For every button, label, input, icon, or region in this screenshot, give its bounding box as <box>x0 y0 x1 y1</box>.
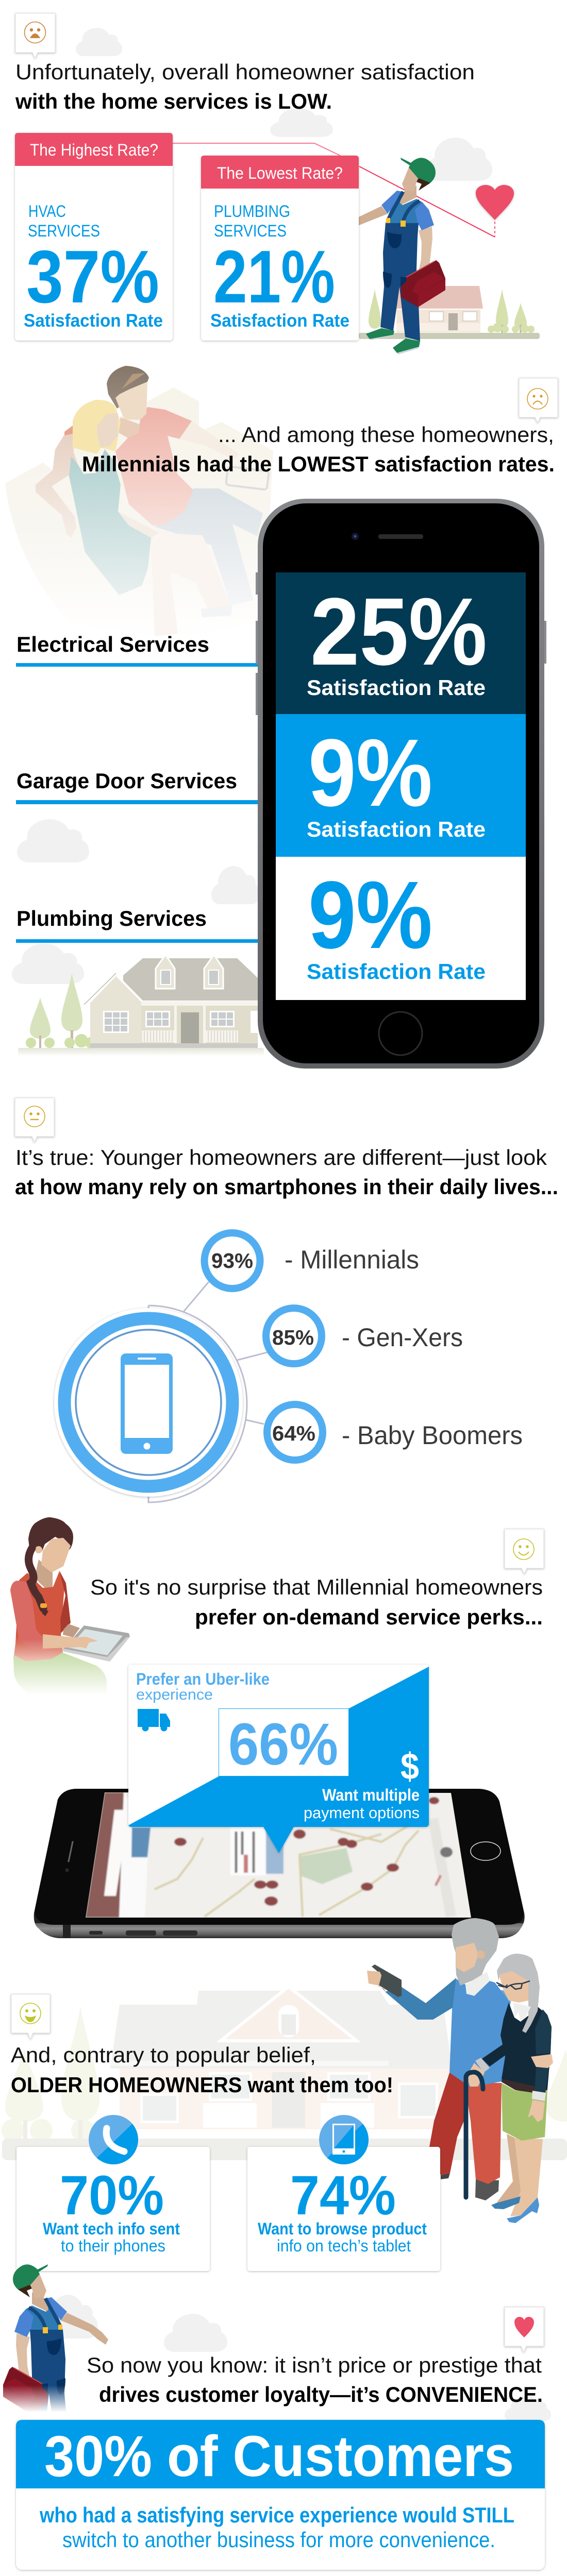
panel header: lowest rate <box>201 156 359 189</box>
service labels: Plumbing Services <box>16 906 207 930</box>
icon: smiling face speech bubble <box>505 1529 544 1574</box>
heading: on-demand service perks: prefer on-demand service perks... <box>195 1605 543 1629</box>
icon: tablet <box>319 2115 369 2164</box>
callout: on-demand perks: Prefer an Uber-like <box>136 1670 270 1688</box>
plumbing services panel <box>276 857 526 1000</box>
panel: 30% of customers <box>16 2420 545 2570</box>
phone with satisfaction rates <box>256 499 546 1069</box>
phone map screen <box>82 1791 474 1920</box>
illustration: plumber with toolbox <box>340 158 445 354</box>
stat: millennials 93%: 93% <box>211 1249 253 1273</box>
illustration: woman with tablet <box>10 1517 130 1695</box>
stat: gen-xers 85%: 85% <box>272 1326 314 1349</box>
stat: baby boomers 64%: 64% <box>272 1421 315 1445</box>
illustration: older couple <box>367 1918 553 2223</box>
illustration: house, trees and ground <box>359 286 540 339</box>
service labels <box>16 632 237 930</box>
decorative clouds, section six <box>43 2295 551 2421</box>
panel: tech info to phones <box>16 2112 210 2271</box>
heading: older homeowners too <box>11 2043 393 2097</box>
garage door services panel <box>276 714 526 857</box>
panel: highest rate: The Highest Rate? <box>30 141 158 159</box>
callout: on-demand perks: experience <box>136 1686 213 1703</box>
icon: red heart <box>476 185 514 220</box>
callout: on-demand perks <box>128 1665 429 1853</box>
service labels: Electrical Services <box>16 632 209 656</box>
panel: browse product on tablet: Want to browse product <box>258 2219 427 2238</box>
icon: sad face speech bubble <box>519 378 558 423</box>
divider lines for service rows <box>16 663 258 943</box>
garage door services panel: 9% <box>308 720 432 826</box>
illustration: plumber, mirrored and fading <box>3 2264 108 2411</box>
panel: browse product on tablet: 74% <box>290 2164 396 2226</box>
service labels: Garage Door Services <box>16 769 237 793</box>
panel: browse product on tablet <box>247 2112 440 2271</box>
heading: younger homeowners rely on smartphones: at how many rely on smartphones in their daily lives... <box>15 1175 558 1199</box>
heading: older homeowners too: OLDER HOMEOWNERS want them too! <box>11 2073 393 2097</box>
panel: highest rate: Satisfaction Rate <box>24 311 163 331</box>
heading: convenience drives loyalty: drives customer loyalty—it’s CONVENIENCE. <box>99 2382 543 2406</box>
panel: browse product on tablet: info on tech’s tablet <box>277 2236 411 2255</box>
icon: delivery truck <box>138 1709 170 1731</box>
stat: millennials 93% <box>204 1233 419 1289</box>
heading: convenience drives loyalty <box>87 2353 543 2406</box>
stat: gen-xers 85%: - Gen-Xers <box>342 1323 463 1352</box>
electrical services panel: Satisfaction Rate <box>307 675 486 700</box>
icon: grinning face speech bubble <box>11 1994 50 2039</box>
panel: lowest rate <box>201 156 359 341</box>
panel: highest rate: HVAC <box>28 202 66 221</box>
banner: 30% of customers: 30% of Customers <box>44 2424 514 2488</box>
connector lines between circles <box>184 1282 267 1424</box>
illustration: landscape phone with map <box>26 1789 541 1939</box>
electrical services panel <box>276 572 526 714</box>
panel: tech info to phones: Want tech info sent <box>43 2219 180 2238</box>
plumbing services panel: Satisfaction Rate <box>307 959 486 984</box>
panel: lowest rate: 21% <box>213 235 335 318</box>
icon: heart speech bubble <box>505 2307 544 2352</box>
background clouds, section one <box>76 28 492 181</box>
electrical services panel: 25% <box>310 579 487 685</box>
heading: older homeowners too: And, contrary to popular belief, <box>11 2043 316 2067</box>
heading: overall satisfaction is low: with the home services is LOW. <box>15 89 332 113</box>
panel: 30% of customers: switch to another business for more convenience. <box>62 2528 495 2552</box>
blue diagonal area <box>128 1667 429 1853</box>
heading: millennials lowest: Millennials had the LOWEST satisfaction rates. <box>82 452 555 476</box>
panel: highest rate <box>15 133 173 341</box>
stat: baby boomers 64%: - Baby Boomers <box>342 1421 523 1450</box>
panel header: highest rate <box>15 133 173 166</box>
panel: lowest rate: Satisfaction Rate <box>210 311 349 331</box>
heading: younger homeowners rely on smartphones: It’s true: Younger homeowners are different—just look <box>15 1145 547 1170</box>
heading: convenience drives loyalty: So now you know: it isn’t price or prestige that <box>87 2353 542 2377</box>
heading: millennials lowest: ... And among these homeowners, <box>218 422 554 447</box>
heading: overall satisfaction is low: Unfortunately, overall homeowner satisfaction <box>15 60 475 84</box>
heading: millennials lowest <box>82 422 555 476</box>
callout: on-demand perks: Want multiple <box>322 1786 420 1804</box>
illustration: faint house background <box>2 1987 567 2160</box>
panel: lowest rate: The Lowest Rate? <box>217 164 343 182</box>
callout: on-demand perks: 66% <box>228 1711 338 1777</box>
icon: unhappy face speech bubble <box>15 13 55 58</box>
callout: on-demand perks: payment options <box>304 1804 420 1822</box>
panel: lowest rate: PLUMBING <box>214 202 290 221</box>
stat: millennials 93%: - Millennials <box>285 1245 419 1274</box>
illustration: faded couple on a sofa <box>5 366 273 639</box>
heading: younger homeowners rely on smartphones <box>15 1145 558 1199</box>
heading: on-demand service perks <box>90 1575 543 1629</box>
decorative clouds, section two <box>12 819 260 984</box>
heading: on-demand service perks: So it's no surprise that Millennial homeowners <box>90 1575 543 1599</box>
chart: central phone circle <box>54 1306 247 1502</box>
illustration: large house with trees <box>18 955 264 1056</box>
panel: lowest rate: SERVICES <box>214 222 287 240</box>
plumbing services panel: 9% <box>308 862 432 969</box>
heading: overall satisfaction is low <box>15 60 475 113</box>
stat: gen-xers 85% <box>266 1308 463 1364</box>
panel: tech info to phones: 70% <box>60 2164 164 2226</box>
panel: highest rate: 37% <box>26 235 159 318</box>
panel: tech info to phones: to their phones <box>61 2236 165 2255</box>
arrow: pink trend line falling to heart <box>173 143 495 237</box>
stat: baby boomers 64% <box>267 1404 523 1460</box>
callout: on-demand perks: $ <box>401 1746 419 1787</box>
icon: smartphone <box>121 1353 173 1454</box>
panel: highest rate: SERVICES <box>28 222 100 240</box>
icon: neutral face speech bubble <box>15 1098 54 1142</box>
garage door services panel: Satisfaction Rate <box>307 817 486 841</box>
icon: telephone handset <box>89 2115 138 2164</box>
